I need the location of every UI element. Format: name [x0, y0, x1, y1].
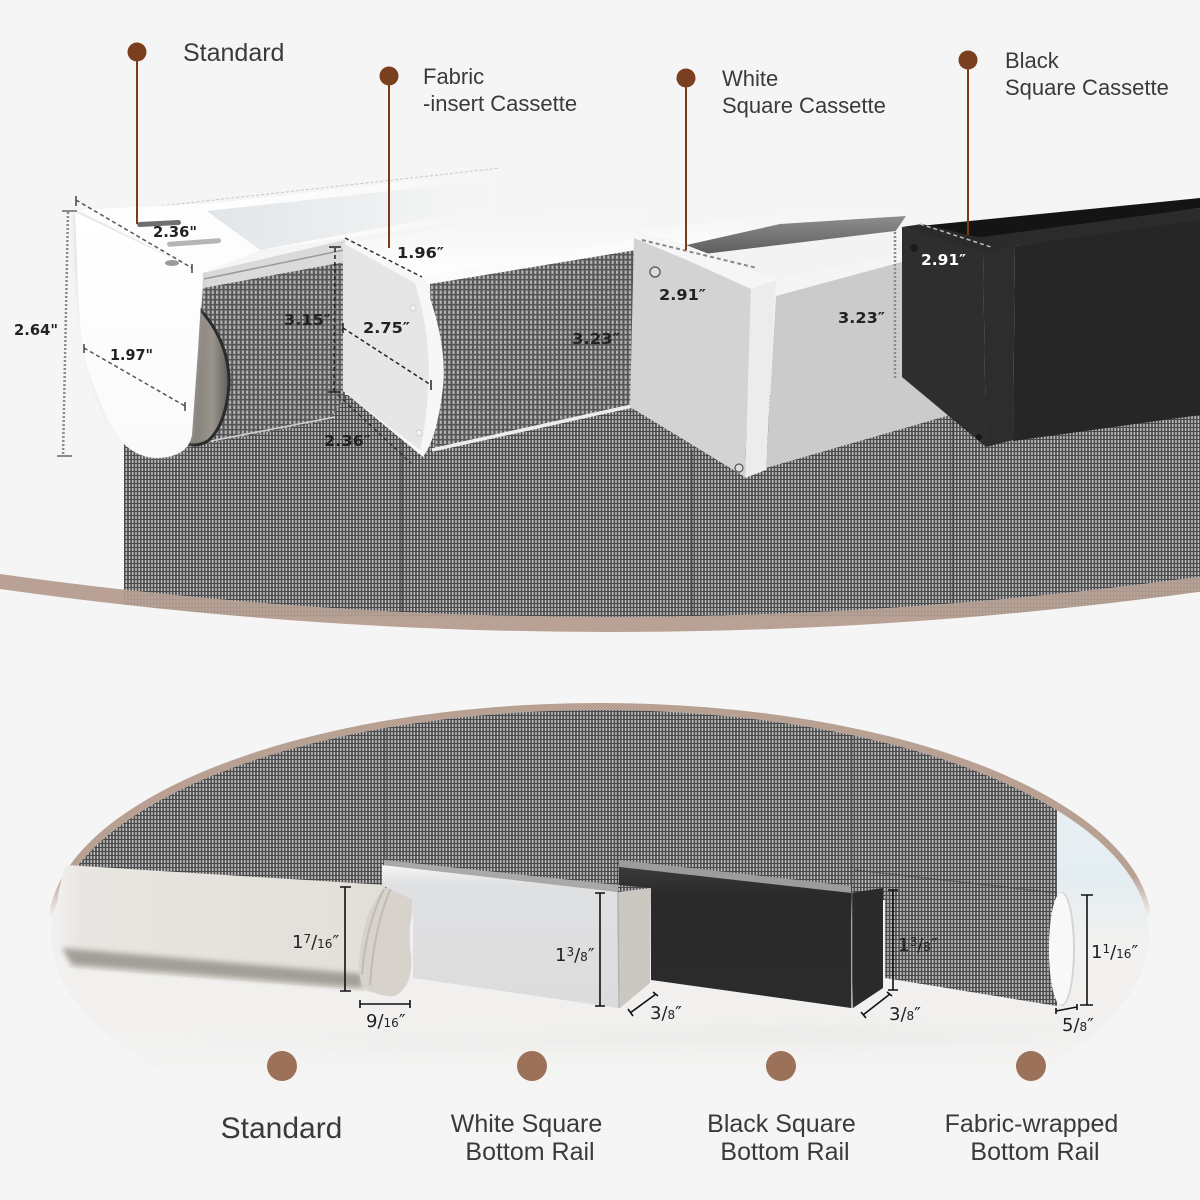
cassette dimension numbers: 1.97" — [110, 346, 153, 364]
icon: black square cassette — [902, 198, 1200, 447]
panel: cassette comparison — [0, 39, 1200, 650]
cassette dimension numbers: 2.36" — [153, 223, 197, 241]
bottom rail dimension numbers: 3 — [909, 935, 917, 949]
bottom rail dimension numbers: 1 — [555, 945, 566, 966]
cassette dimension numbers: 3.23″ — [838, 309, 885, 327]
bottom rail dimension lines — [340, 887, 1093, 1018]
cassette dimension numbers: 2.64" — [14, 321, 58, 339]
cassette dimension numbers: 3.15″ — [284, 311, 331, 329]
bottom rail dimension numbers: 3/8″ — [889, 1004, 921, 1025]
curved tan band — [0, 570, 1200, 632]
bottom rail dimension numbers: 9/16″ — [366, 1011, 406, 1032]
black square bottom rail — [619, 860, 883, 1008]
bottom rail dimension numbers: 3/8″ — [650, 1003, 682, 1024]
standard headrail — [107, 168, 530, 447]
callout: black square cassette: Square Cassette — [1005, 75, 1169, 100]
label: standard rail — [221, 1051, 342, 1145]
bottom rail dimension numbers: 16″ — [317, 932, 339, 953]
callout: black square cassette — [958, 48, 1169, 235]
label: black square rail: Bottom Rail — [720, 1138, 850, 1166]
callout: standard cassette: Standard — [183, 39, 284, 67]
bottom rail dimension numbers: / — [1110, 942, 1117, 963]
standard bottom rail — [57, 865, 412, 996]
cassette dimension numbers: 3.23″ — [572, 330, 620, 348]
icon: white square cassette end — [630, 236, 776, 478]
label: white square rail — [451, 1051, 602, 1166]
bottom rail dimension numbers — [292, 932, 1138, 1036]
bottom rail dimension numbers: 5/8″ — [1062, 1015, 1094, 1036]
icon: standard roller and end cap — [75, 204, 260, 458]
bottom rail dimension numbers: / — [311, 932, 318, 953]
label: white square rail: Bottom Rail — [465, 1138, 595, 1166]
bottom rail dimension numbers: 3 — [566, 945, 574, 959]
callout: black square cassette: Black — [1005, 48, 1060, 73]
label: black square rail — [707, 1051, 856, 1166]
dome backdrop — [50, 703, 1150, 922]
label: fabric-wrapped rail — [945, 1051, 1118, 1166]
cassette dimension numbers: 2.36″ — [324, 432, 371, 450]
panel: bottom rail comparison — [48, 703, 1152, 1166]
bottom rail dimension numbers: / — [917, 935, 924, 956]
cassette dimension numbers: 1.96″ — [397, 244, 444, 262]
cassette dimension numbers — [14, 223, 966, 450]
icon: fabric-insert end cap — [343, 243, 444, 457]
callout: fabric-insert cassette: Fabric — [423, 64, 484, 89]
callout: fabric-insert cassette — [380, 64, 577, 248]
bottom rail dimension numbers: / — [574, 945, 581, 966]
callout: standard cassette — [128, 39, 284, 224]
label: fabric-wrapped rail: Fabric-wrapped — [945, 1110, 1118, 1138]
floor haze — [200, 1028, 1120, 1046]
bottom rail dimension numbers: 7 — [303, 932, 311, 946]
label: black square rail: Black Square — [707, 1110, 856, 1138]
label: fabric-wrapped rail: Bottom Rail — [970, 1138, 1100, 1166]
callout: white square cassette — [676, 66, 886, 250]
white cassette body — [640, 200, 950, 468]
fabric-wrapped bottom rail — [1049, 892, 1075, 1006]
bottom rail dimension numbers: 1 — [898, 935, 909, 956]
cassette dimension numbers: 2.91″ — [921, 251, 966, 269]
lower hanging fabric — [124, 395, 1200, 617]
bottom rail dimension numbers: 1 — [292, 932, 303, 953]
bottom rail dimension numbers: 8″ — [923, 935, 938, 956]
fabric-insert headrail — [345, 198, 650, 450]
bottom rail dimension numbers: 16″ — [1116, 942, 1138, 963]
label: white square rail: White Square — [451, 1110, 602, 1138]
cassette dimension numbers: 2.91″ — [659, 286, 706, 304]
dimension lines — [57, 196, 991, 463]
cassette dimension numbers: 2.75″ — [363, 319, 410, 337]
bottom rail dimension numbers: 1 — [1091, 942, 1102, 963]
callout: white square cassette: White — [722, 66, 778, 91]
callout: white square cassette: Square Cassette — [722, 93, 886, 118]
label: standard rail: Standard — [221, 1112, 342, 1145]
bottom rail dimension numbers: 1 — [1102, 942, 1110, 956]
callout: fabric-insert cassette: -insert Cassette — [423, 91, 577, 116]
white square bottom rail — [382, 860, 651, 1008]
dome fabric — [50, 703, 1057, 1006]
bottom rail dimension numbers: 8″ — [580, 945, 595, 966]
